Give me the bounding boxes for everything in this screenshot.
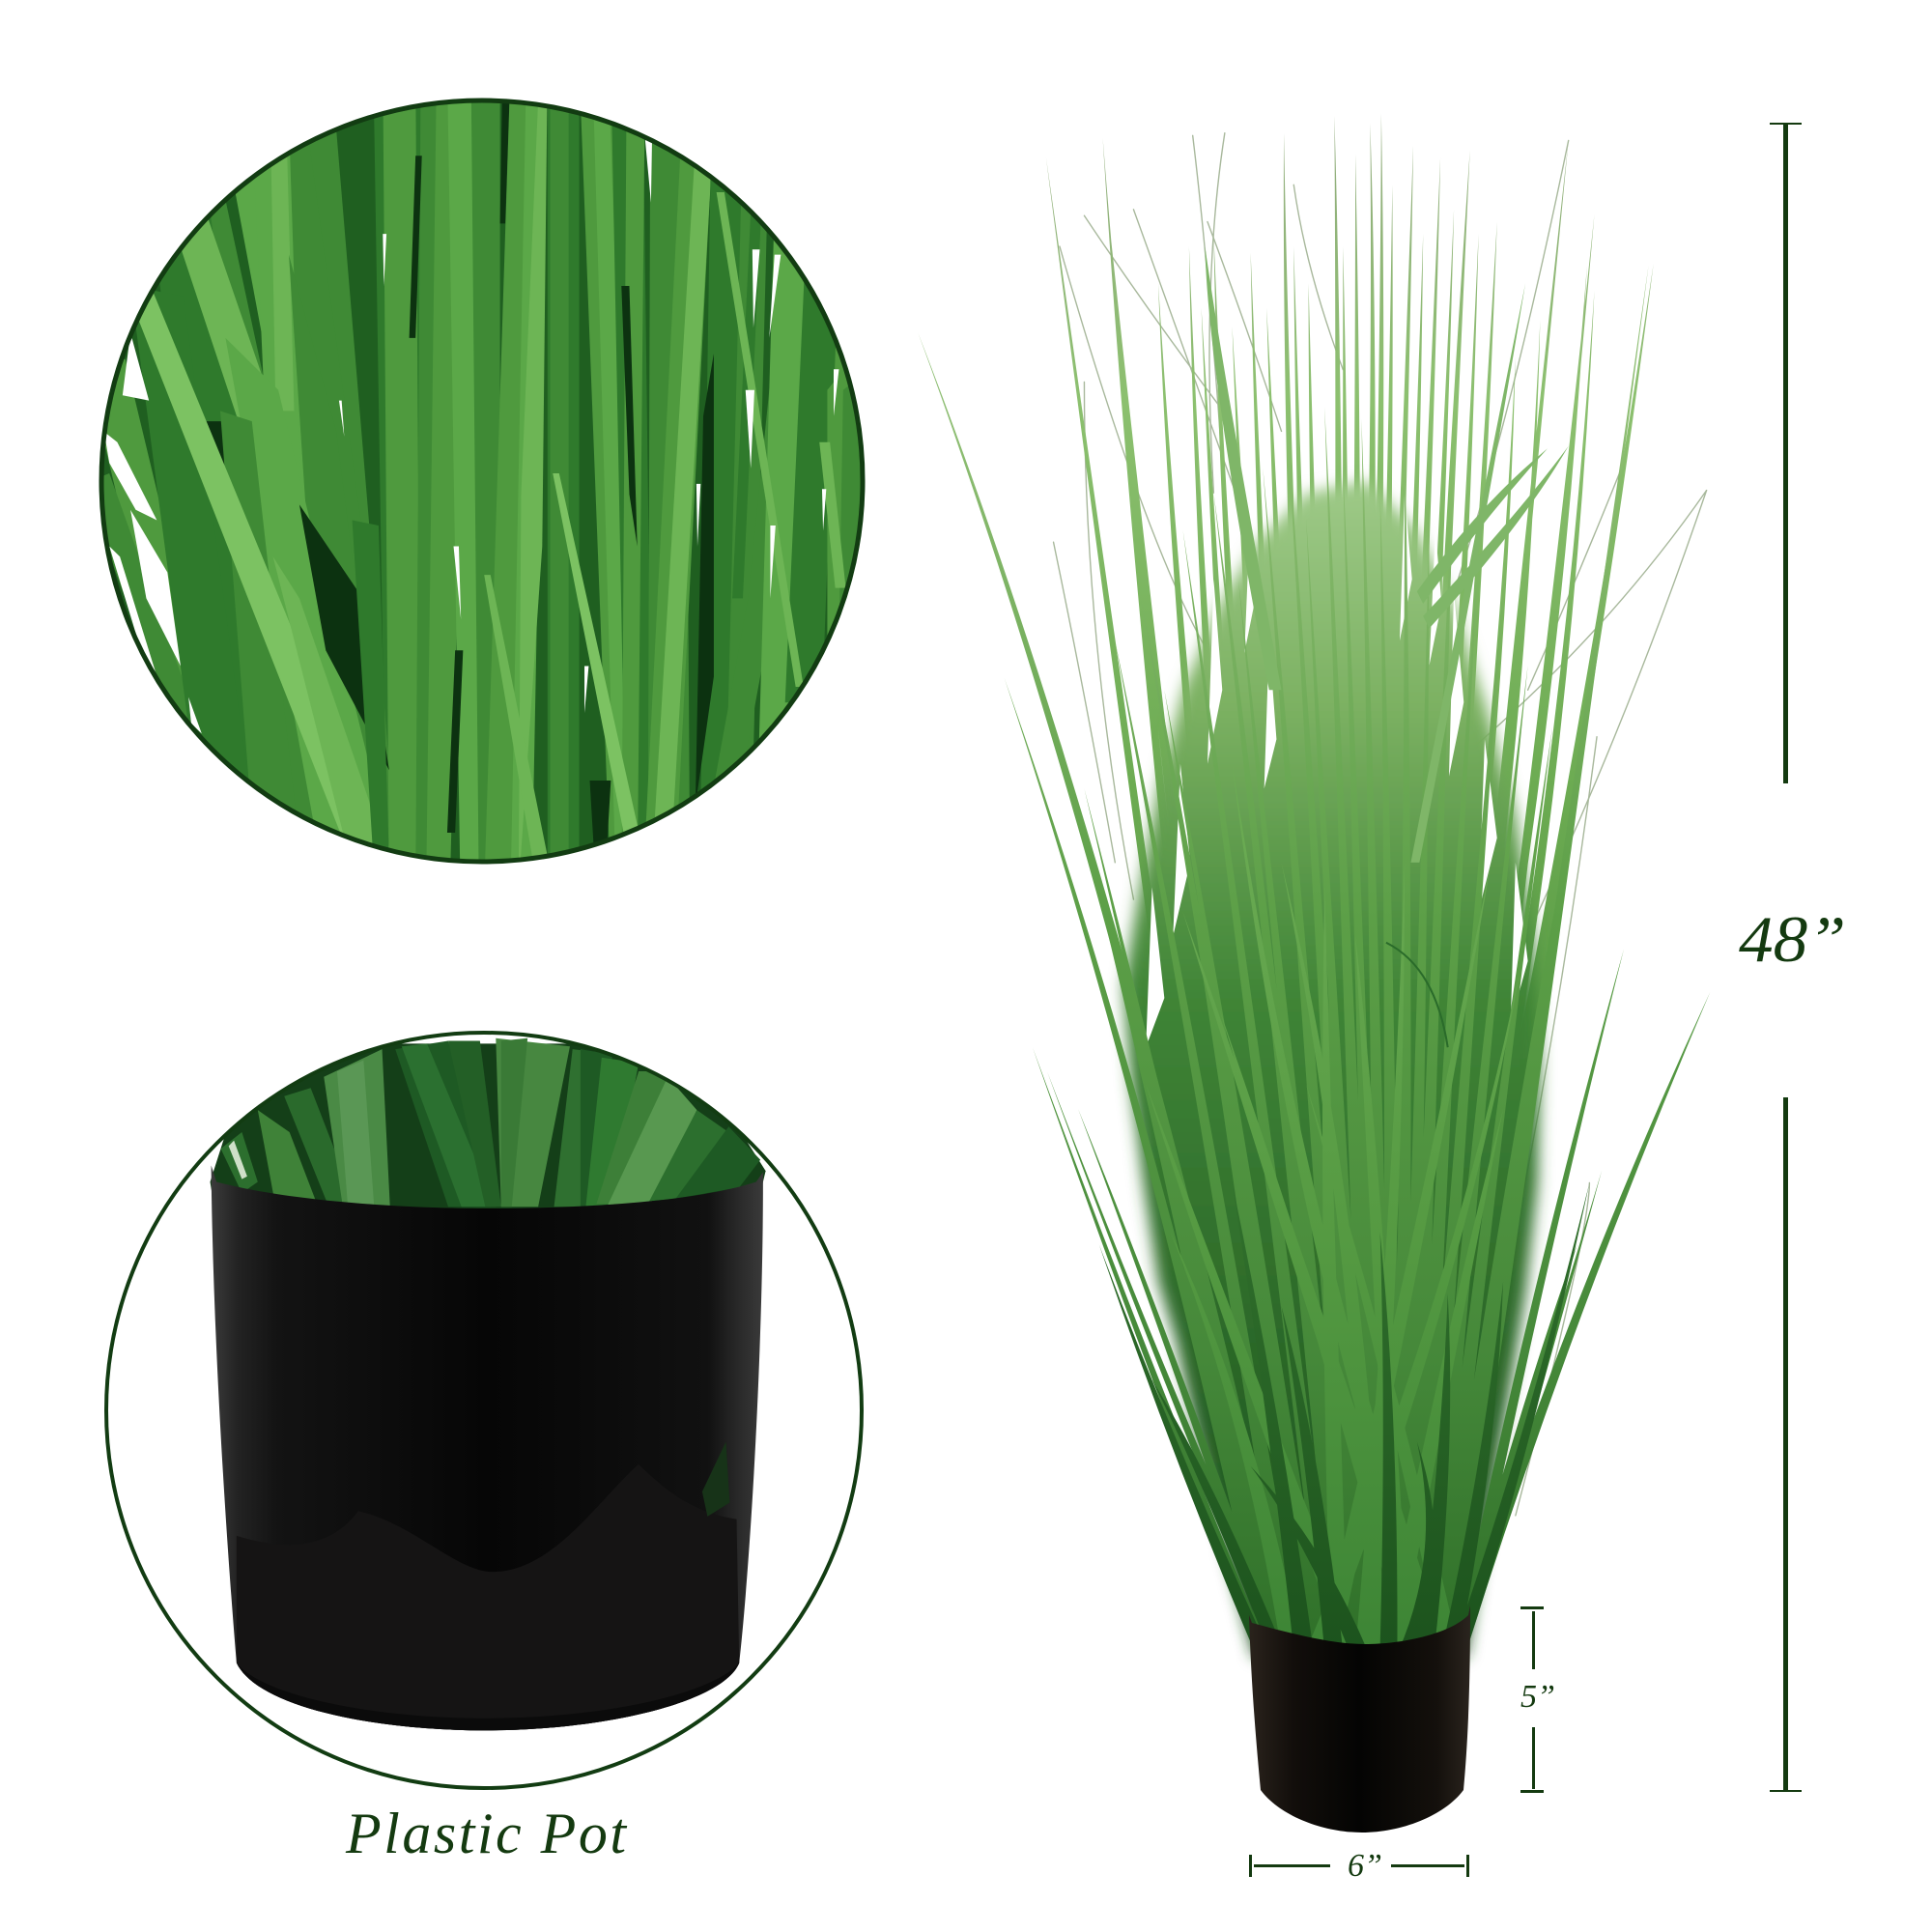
small black pot <box>1249 1605 1470 1833</box>
long outlier blades <box>918 332 1710 1651</box>
dimension: 48 inch height <box>1739 123 1846 1792</box>
dark lower blades <box>1099 1182 1589 1651</box>
circle: grass blade close-up <box>99 99 866 864</box>
caption: plastic pot: Plastic Pot <box>345 1802 627 1865</box>
dimension: 6 inch pot width <box>1249 1848 1469 1884</box>
dimension: 6 inch pot width: 6” <box>1348 1848 1382 1884</box>
circle: plastic pot close-up <box>106 1033 862 1788</box>
tall light blades <box>1046 113 1654 1109</box>
full plant: ornamental grass <box>918 113 1710 1658</box>
close-up grass above pot <box>211 1038 766 1215</box>
dimension: 5 inch pot height: 5” <box>1520 1679 1555 1715</box>
small light accent blades <box>1205 246 1569 863</box>
dimension: 5 inch pot height <box>1520 1606 1555 1793</box>
close-up black pot <box>212 1165 763 1730</box>
bright crossing blades <box>1146 764 1521 1651</box>
dimension: 48 inch height: 48” <box>1739 902 1846 976</box>
medium body blades <box>1060 265 1649 1651</box>
plant main mass <box>1123 480 1540 1658</box>
faint thin back blades <box>1054 133 1707 1516</box>
white gaps in upper plant <box>1146 493 1528 1047</box>
